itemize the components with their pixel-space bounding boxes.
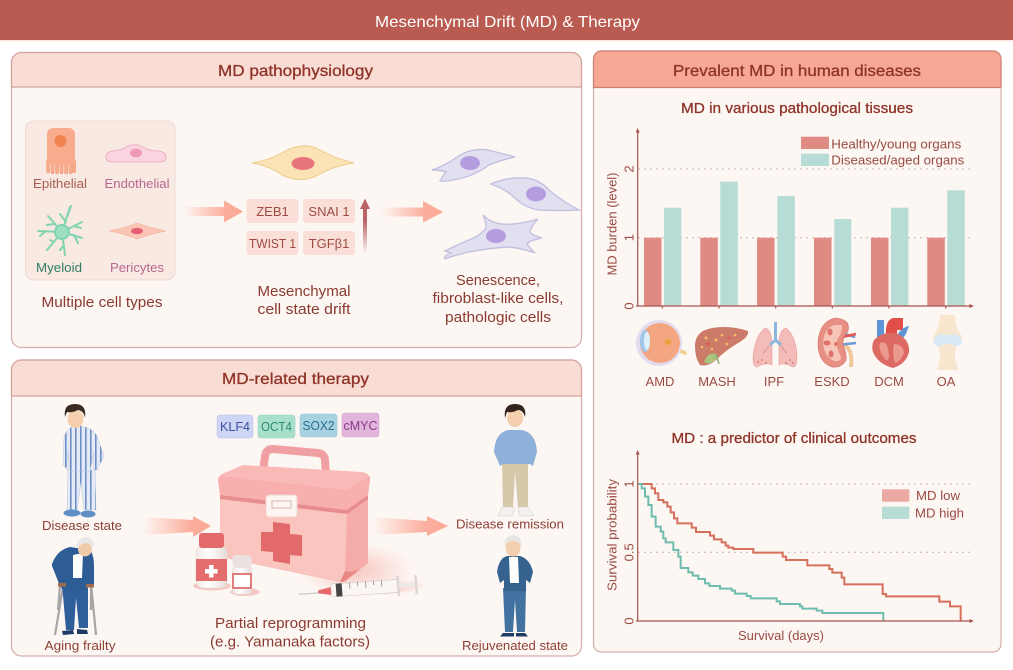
x axis label: Survival (days) — [738, 628, 824, 643]
label: Epithelial: Epithelial — [33, 176, 87, 191]
tag: TWIST 1 — [246, 231, 298, 255]
tag: SNAI 1 — [303, 199, 355, 223]
icon: syringe — [297, 573, 428, 603]
icon: pericyte — [109, 223, 166, 239]
y ticks: 1 — [622, 480, 636, 488]
label: Mesenchymal cell state drift: cell state drift — [258, 302, 350, 318]
tag: cMYC: cMYC — [344, 418, 378, 433]
label: Disease state: Disease state — [42, 518, 122, 533]
label: Senescence, fibroblast-like cells, pathologic cells: pathologic cells — [445, 310, 551, 326]
label: Rejuvenated state: Rejuvenated state — [462, 638, 568, 653]
tag: TGFβ1: TGFβ1 — [309, 236, 349, 251]
arrow: states to therapy — [143, 516, 211, 537]
organ labels: MASH — [698, 374, 736, 389]
cell types box — [26, 121, 175, 280]
label: Myeloid: Myeloid — [36, 260, 82, 275]
icon: endothelial cell — [106, 145, 166, 162]
tag: SOX2: SOX2 — [302, 418, 334, 433]
heading: MD-related therapy: MD-related therapy — [222, 371, 369, 388]
tag: TWIST 1: TWIST 1 — [249, 236, 296, 251]
icon: heart — [872, 318, 909, 368]
factor tags — [217, 413, 379, 438]
chart title: MD a predictor of clinical outcomes: MD : a predictor of clinical outcomes — [672, 431, 916, 447]
icon: knee joint — [933, 315, 962, 370]
legend: Healthy/young organs — [831, 136, 962, 152]
legend — [801, 136, 965, 168]
organ labels: AMD — [646, 374, 674, 389]
label: Senescence, fibroblast-like cells, pathologic cells: fibroblast-like cells, — [432, 291, 564, 307]
organ labels: DCM — [874, 374, 904, 389]
icon: large medicine bottle — [193, 533, 231, 590]
figure: elderly man with crutches — [52, 537, 96, 635]
label: Disease remission: Disease remission — [456, 516, 564, 532]
label: Senescence, fibroblast-like cells, pathologic cells: Senescence, — [456, 273, 540, 289]
legend: MD low — [916, 488, 961, 503]
icon: lungs — [753, 322, 797, 367]
label: Pericytes: Pericytes — [110, 260, 164, 275]
tag: SOX2 — [300, 414, 337, 437]
arrow: drift to pathologic cells — [381, 201, 443, 222]
icon: kidney — [818, 318, 856, 367]
label: Multiple cell types: Multiple cell types — [42, 295, 162, 311]
label: Mesenchymal cell state drift: Mesenchymal — [258, 284, 350, 300]
label: Aging frailty: Aging frailty — [44, 638, 116, 653]
organ labels: ESKD — [814, 374, 850, 389]
y axis label: Survival probability — [604, 478, 620, 591]
bar chart: MD burden — [604, 128, 974, 310]
y ticks: 0.5 — [622, 543, 636, 561]
organ labels: OA — [937, 374, 956, 389]
tag: SNAI 1: SNAI 1 — [308, 204, 350, 219]
label: Endothelial: Endothelial — [104, 176, 170, 191]
title bar: Mesenchymal Drift (MD) & Therapy — [375, 14, 640, 31]
y ticks — [622, 480, 636, 625]
icon: liver — [695, 327, 748, 365]
arrow: therapy to outcomes — [373, 516, 448, 536]
figure: healthy young man — [494, 404, 537, 516]
y axis label: MD burden (level) — [604, 172, 620, 276]
tag: cMYC — [342, 413, 379, 437]
panel: MD-related therapy — [12, 360, 582, 656]
tag: KLF4: KLF4 — [220, 419, 250, 434]
y ticks: 0 — [622, 302, 636, 310]
chart title: MD in various pathological tissues: MD in various pathological tissues — [681, 101, 913, 117]
icon: myeloid cell — [38, 206, 82, 255]
label: Mesenchymal cell state drift — [258, 284, 350, 318]
y ticks: 2 — [622, 165, 636, 173]
title bar — [0, 0, 1013, 42]
icon: epithelial cell — [46, 128, 76, 174]
heading: Prevalent MD in human diseases: Prevalent MD in human diseases — [673, 63, 921, 80]
tag: ZEB1 — [246, 199, 298, 223]
panel: Prevalent MD in human diseases — [594, 51, 1001, 652]
tag: ZEB1: ZEB1 — [256, 204, 289, 219]
label: Senescence, fibroblast-like cells, pathologic cells — [432, 273, 564, 326]
y ticks — [622, 165, 636, 310]
label: Partial reprogramming (e.g. Yamanaka factors) — [210, 616, 370, 650]
tag: TGFβ1 — [303, 231, 355, 255]
icon: spindle mesenchymal cell — [252, 146, 354, 180]
panel: MD pathophysiology — [12, 52, 582, 348]
label: Partial reprogramming (e.g. Yamanaka factors): Partial reprogramming — [215, 616, 366, 632]
legend — [882, 488, 964, 520]
figure: rejuvenated elderly man — [497, 535, 533, 636]
tag: KLF4 — [217, 415, 253, 438]
legend: MD high — [915, 506, 964, 520]
y ticks: 1 — [622, 234, 636, 241]
arrow: cell types to drift — [183, 200, 243, 222]
figure: patient in pajamas — [63, 404, 104, 518]
y ticks: 0 — [622, 617, 636, 625]
tag: OCT4 — [258, 415, 295, 438]
heading: MD pathophysiology: MD pathophysiology — [218, 63, 373, 80]
icon: pathologic purple cells — [432, 149, 579, 259]
icon: small medicine bottle — [230, 555, 260, 596]
label: Partial reprogramming (e.g. Yamanaka factors): (e.g. Yamanaka factors) — [210, 634, 370, 650]
legend: Diseased/aged organs — [831, 152, 965, 168]
arrow: up-regulation — [360, 198, 370, 254]
icon: eye — [636, 320, 687, 366]
icon: medical kit — [218, 449, 413, 598]
organ labels: IPF — [764, 374, 784, 389]
organ labels — [646, 374, 956, 389]
tag: OCT4: OCT4 — [261, 419, 292, 434]
survival chart — [604, 450, 974, 643]
